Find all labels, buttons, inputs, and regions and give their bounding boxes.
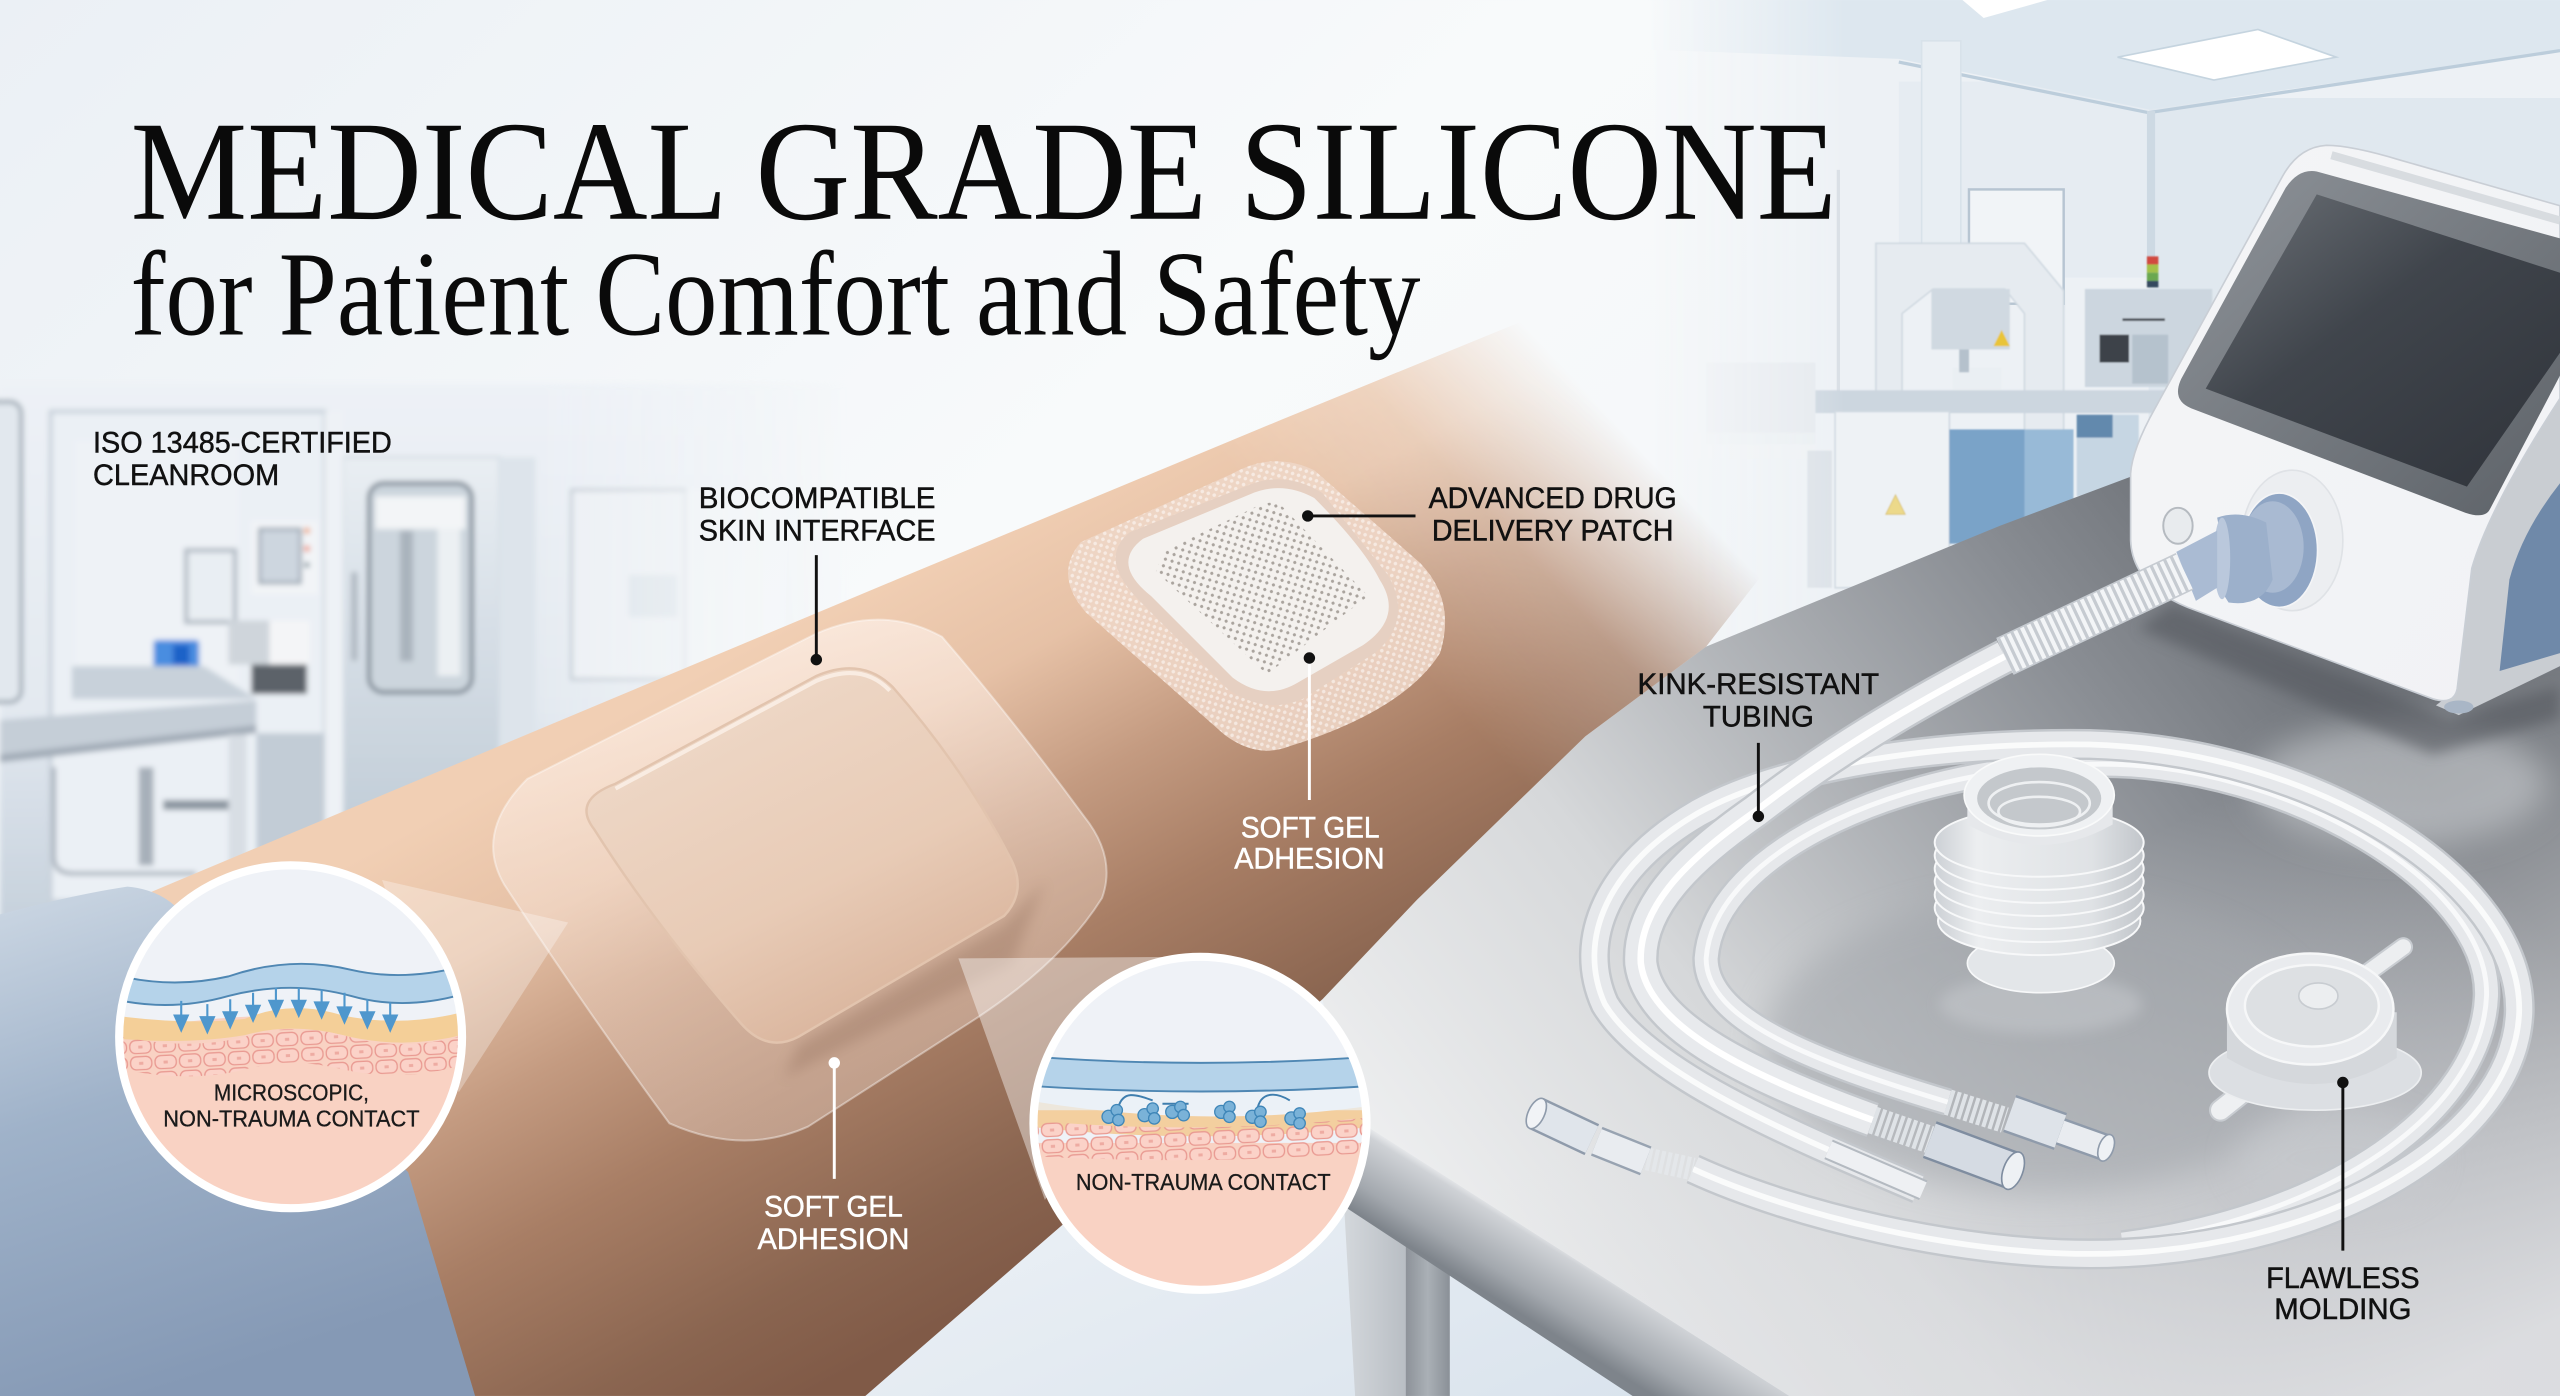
label: soft gel adhesion lower: ADHESION bbox=[758, 1223, 909, 1256]
circle caption: NON-TRAUMA CONTACT bbox=[163, 1106, 420, 1132]
device shadow bbox=[2139, 604, 2560, 754]
contact clusters bbox=[1102, 1095, 1305, 1129]
table legs bbox=[1340, 1143, 1450, 1396]
white drug pad bbox=[1128, 488, 1389, 691]
floor under the table bbox=[865, 999, 1789, 1396]
left connector bbox=[1522, 1095, 1693, 1169]
blue silicone band bbox=[1029, 1056, 1375, 1091]
title: MEDICAL GRADE SILICONE bbox=[131, 92, 1837, 250]
label: kink-resistant tubing: KINK-RESISTANT bbox=[1638, 668, 1879, 701]
table edge band bbox=[1342, 1110, 1789, 1396]
title bbox=[131, 92, 1837, 362]
small drug delivery patch bbox=[1068, 461, 1445, 751]
label: kink-resistant tubing: TUBING bbox=[1703, 701, 1814, 734]
arm bbox=[152, 330, 1753, 1396]
ceiling light panels bbox=[1962, 0, 2336, 80]
cell layer bbox=[1029, 1117, 1375, 1160]
label: flawless molding: MOLDING bbox=[2274, 1293, 2411, 1326]
center connector one bbox=[1873, 1120, 2029, 1192]
device rim and blue side bbox=[2436, 392, 2560, 715]
label: flawless molding bbox=[2266, 1077, 2420, 1326]
circle inset: microscopic contact bbox=[114, 857, 473, 1216]
cleanroom machines bbox=[1808, 242, 2212, 589]
fat layer bbox=[1029, 1100, 1375, 1136]
magnifier beam right bbox=[958, 957, 1200, 1200]
label: ISO cleanroom bbox=[93, 426, 392, 492]
air outlet port bbox=[2176, 470, 2343, 611]
bellows neck bbox=[1967, 794, 2113, 845]
device white housing bbox=[2131, 145, 2560, 701]
bellows ribs bbox=[1935, 808, 2144, 955]
fat layer bbox=[114, 1008, 473, 1043]
label: biocompatible skin interface: SKIN INTERFACE bbox=[699, 514, 936, 547]
cleanroom door bbox=[343, 457, 500, 849]
label: advanced drug delivery patch bbox=[1302, 482, 1677, 547]
patient sleeve bbox=[0, 887, 475, 1396]
contact arrows bbox=[175, 988, 397, 1032]
circle inset: non-trauma contact bbox=[1029, 952, 1375, 1298]
stainless steel table bbox=[1322, 376, 2560, 1396]
label: advanced drug delivery patch: DELIVERY PATCH bbox=[1432, 514, 1673, 547]
filter ports bbox=[2220, 947, 2403, 1110]
label: soft gel adhesion lower bbox=[758, 1057, 909, 1256]
blue silicone band bbox=[114, 963, 473, 1005]
patch border bbox=[493, 620, 1107, 1140]
mesh border bbox=[1068, 461, 1445, 751]
device foot bbox=[2444, 700, 2473, 714]
label: kink-resistant tubing bbox=[1638, 668, 1879, 822]
label: soft gel adhesion lower: SOFT GEL bbox=[764, 1190, 903, 1223]
silicone bellows bbox=[1935, 754, 2144, 1034]
subtitle: for Patient Comfort and Safety bbox=[131, 228, 1420, 362]
right cleanroom scene bbox=[1709, 0, 2560, 590]
center connector two bbox=[1948, 1102, 2118, 1163]
patch gel pad bbox=[586, 668, 1018, 1043]
cell layer bbox=[114, 1029, 473, 1076]
large soft gel patch bbox=[493, 620, 1107, 1140]
inner ring tube bbox=[1706, 764, 2487, 1244]
circle caption: NON-TRAUMA CONTACT bbox=[1076, 1169, 1331, 1195]
power button bbox=[2163, 508, 2193, 544]
silicone tubing loops bbox=[1594, 571, 2519, 1254]
circle caption: MICROSCOPIC, bbox=[214, 1079, 369, 1105]
circle caption bbox=[164, 1084, 420, 1127]
label: biocompatible skin interface: BIOCOMPATIBLE bbox=[699, 482, 936, 515]
label: flawless molding: FLAWLESS bbox=[2266, 1262, 2420, 1295]
skin base bbox=[123, 1016, 458, 1204]
clear connectors bbox=[1522, 1095, 2118, 1192]
label: soft gel adhesion upper: SOFT GEL bbox=[1241, 812, 1380, 845]
molded filter disc bbox=[2209, 947, 2421, 1110]
outer ring tube bbox=[1594, 744, 2519, 1254]
device tube bbox=[1641, 571, 2184, 1120]
skin base bbox=[1039, 1142, 1361, 1286]
left cleanroom scene bbox=[0, 396, 688, 914]
table top bbox=[1322, 376, 2560, 1396]
label: ISO cleanroom: CLEANROOM bbox=[93, 459, 279, 492]
label: ISO cleanroom: ISO 13485-CERTIFIED bbox=[93, 426, 392, 459]
label: biocompatible skin interface bbox=[699, 482, 936, 665]
label: soft gel adhesion upper: ADHESION bbox=[1234, 843, 1384, 876]
nozzle end bbox=[1829, 1149, 1923, 1190]
magnifier beam left bbox=[382, 880, 568, 1092]
label: soft gel adhesion upper bbox=[1234, 652, 1384, 876]
bellows base bbox=[1967, 934, 2114, 993]
breathing device bbox=[2131, 145, 2560, 715]
device screen bbox=[2178, 171, 2560, 515]
corrugated section bbox=[2005, 571, 2184, 656]
label: advanced drug delivery patch: ADVANCED DRUG bbox=[1429, 482, 1677, 515]
